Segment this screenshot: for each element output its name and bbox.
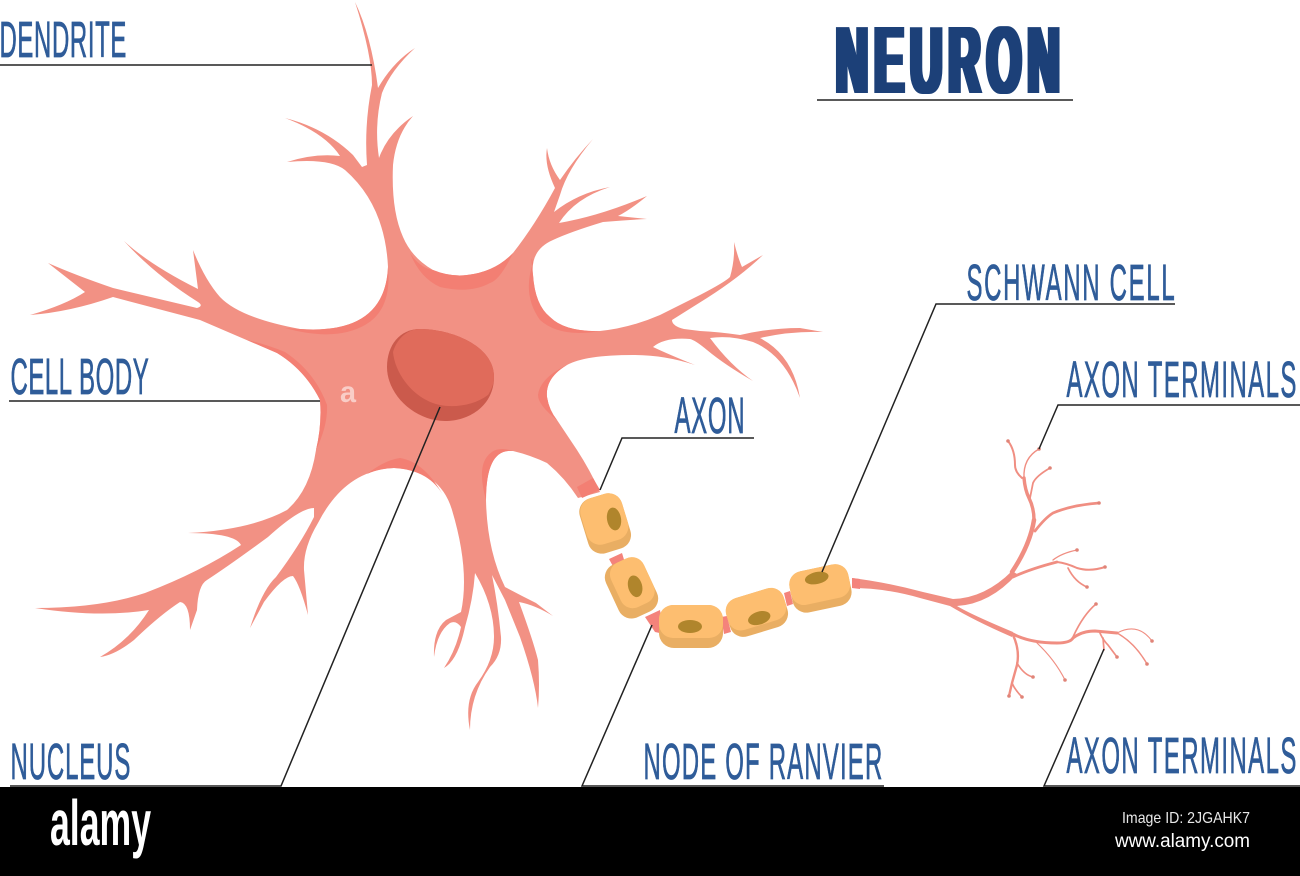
- nucleus: [387, 329, 494, 421]
- label: schwann cell: SCHWANN CELL: [966, 255, 1175, 312]
- neuron illustration: [30, 2, 1154, 730]
- footer bar: [0, 787, 1300, 876]
- label: dendrite: DENDRITE: [0, 12, 126, 69]
- axon and axon terminals: [852, 439, 1154, 699]
- membrane shading crescents: [247, 253, 600, 500]
- label: nucleus: [10, 407, 440, 791]
- axon segments between Schwann cells: [609, 553, 793, 634]
- label: nucleus: NUCLEUS: [10, 734, 130, 791]
- Schwann cell 1: [576, 490, 635, 557]
- label: axon: AXON: [674, 388, 745, 445]
- label: node of ranvier: [582, 625, 884, 791]
- label: axon terminals upper: AXON TERMINALS: [1066, 352, 1296, 409]
- Schwann cell 3: [659, 605, 723, 648]
- label: node of ranvier: NODE OF RANVIER: [644, 734, 882, 791]
- label: axon terminals lower: [1044, 649, 1300, 786]
- website: www.alamy.com: [1114, 831, 1250, 852]
- label: axon terminals upper: [1039, 352, 1300, 449]
- title: NEURON: [836, 6, 1066, 114]
- Schwann cells: [576, 490, 854, 648]
- footer logo: alamy: [50, 787, 151, 859]
- Schwann cell 5: [787, 562, 854, 615]
- image id: Image ID: 2JGAHK7: [1122, 810, 1250, 827]
- label: schwann cell: [822, 255, 1175, 572]
- label: axon: [600, 388, 754, 490]
- Schwann cell 2: [600, 553, 663, 623]
- label: cell body: CELL BODY: [10, 349, 149, 406]
- cell body and dendrites: [30, 2, 823, 730]
- watermark letter: a: [340, 376, 356, 409]
- label: axon terminals lower: AXON TERMINALS: [1066, 728, 1296, 785]
- Schwann cell 4: [722, 585, 792, 640]
- terminal end dots: [1006, 439, 1154, 699]
